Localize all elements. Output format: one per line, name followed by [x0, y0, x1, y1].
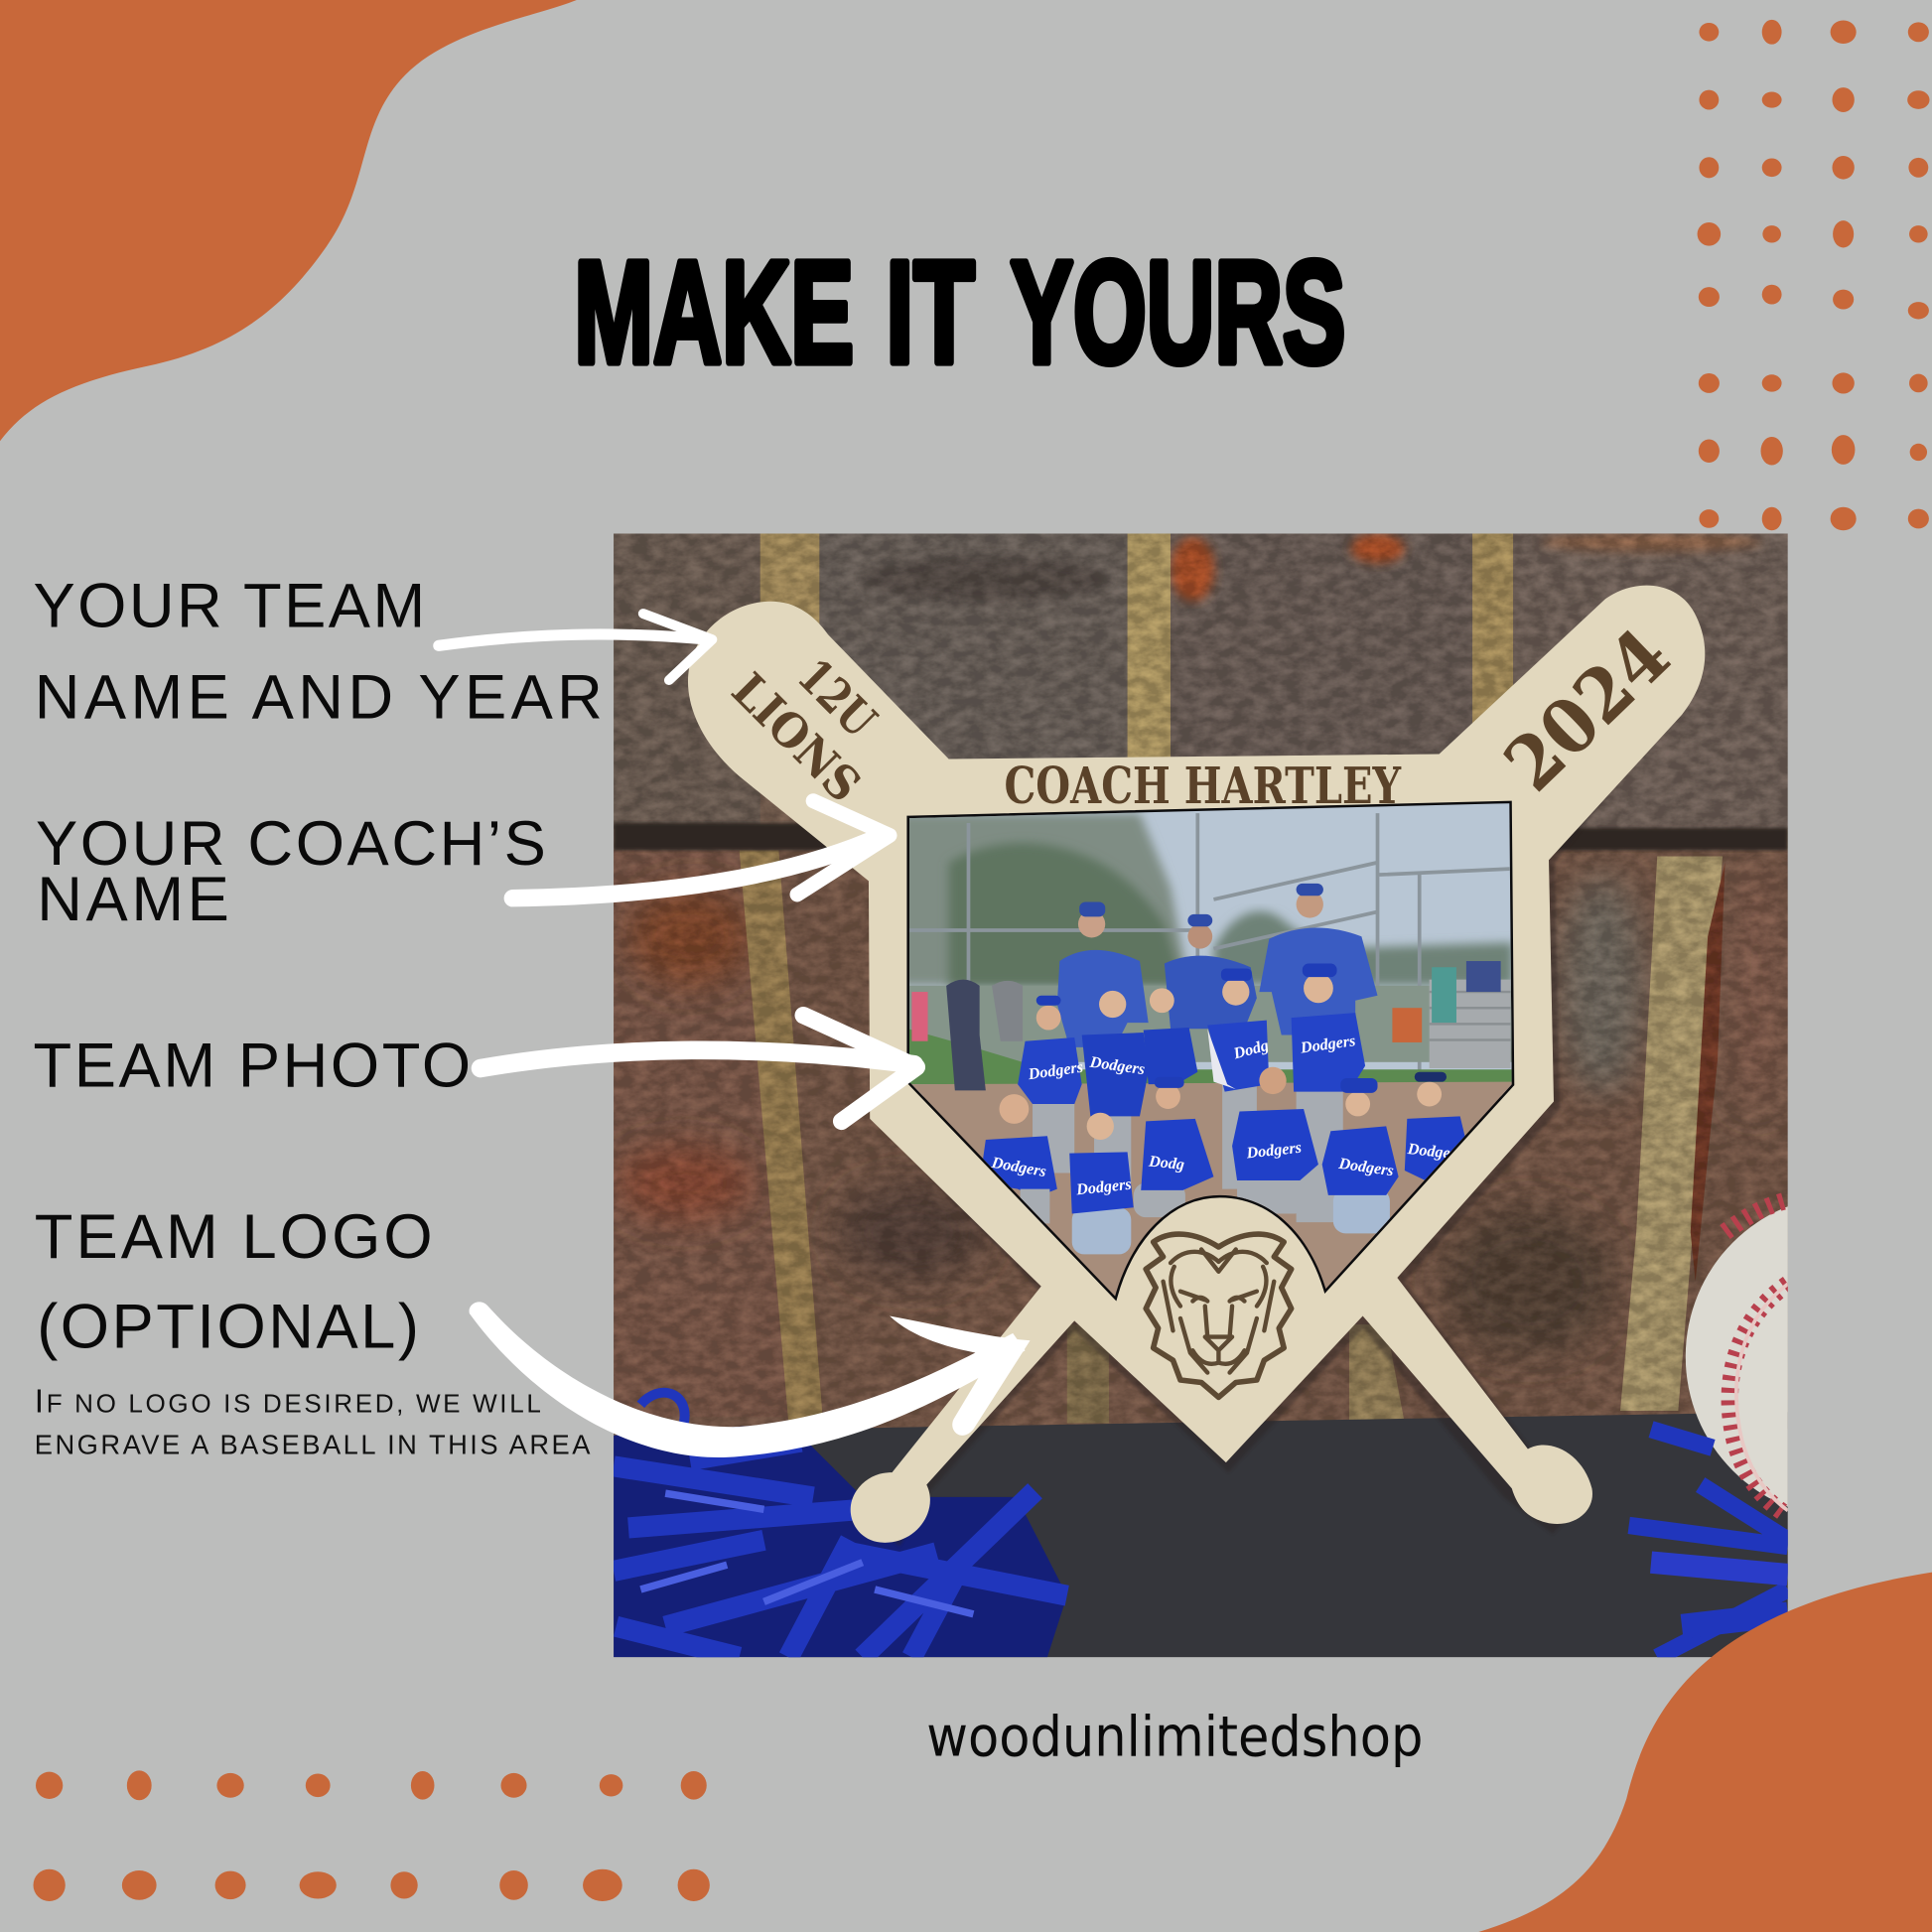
team photo	[899, 801, 1513, 1307]
back row players: Dodg	[1231, 1037, 1271, 1063]
front row players: Dodgers	[1074, 1176, 1132, 1199]
label: team logo: TEAM LOGO	[35, 1202, 433, 1272]
arrow: to team name	[439, 614, 712, 680]
front row players	[980, 1067, 1468, 1254]
title	[574, 231, 1345, 394]
shelf	[788, 1412, 1788, 1657]
engraving: team name: LIONS	[721, 663, 871, 813]
label: team name and year: NAME AND YEAR	[35, 663, 603, 733]
engraving: lion logo	[1146, 1234, 1292, 1397]
dot grid: bottom left	[34, 1770, 710, 1901]
back row players: Dodgers	[1027, 1059, 1084, 1083]
front row players: Dodg	[1147, 1153, 1185, 1173]
arrow: to team photo	[481, 1016, 916, 1121]
title: IT	[886, 231, 975, 394]
brick wall	[614, 532, 1788, 1657]
shop name: woodunlimitedshop	[926, 1706, 1423, 1770]
label: coach's name	[36, 809, 546, 934]
arrow: to team logo	[470, 1302, 1031, 1457]
front row players: Dodgers	[1336, 1156, 1395, 1179]
label: team name and year	[34, 572, 603, 733]
label: team logo	[35, 1202, 433, 1362]
front row players: Dodgers	[989, 1155, 1047, 1180]
engraving: age group: 12U	[786, 649, 887, 749]
decorative blob: bottom right	[1478, 1573, 1932, 1932]
label: coach's name: YOUR COACH’S	[36, 809, 546, 879]
arrow: to coach name	[512, 801, 890, 898]
title: MAKE	[574, 231, 854, 394]
decorative blob: top left	[0, 0, 577, 441]
coaches	[1057, 884, 1378, 1047]
label: coach's name: NAME	[37, 865, 229, 934]
blue streamers	[614, 1393, 1788, 1657]
title: YOURS	[1011, 231, 1345, 394]
back row players: Dodgers	[1299, 1033, 1356, 1057]
note: no logo: IF NO LOGO IS DESIRED, WE WILL	[35, 1383, 541, 1420]
label: team photo: TEAM PHOTO	[34, 1032, 471, 1101]
label: team logo: (OPTIONAL)	[37, 1293, 419, 1362]
front row players: Dodgers	[1406, 1141, 1463, 1164]
product photo	[614, 533, 1788, 1658]
label: team name and year: YOUR TEAM	[34, 572, 425, 641]
photo window	[909, 803, 1512, 1297]
dot grid: top right	[1698, 20, 1930, 530]
note: no logo	[35, 1383, 591, 1459]
back row players: Dodgers	[1088, 1053, 1146, 1078]
back row players	[1018, 964, 1365, 1222]
engraving: coach name: COACH HARTLEY	[1004, 756, 1402, 815]
wood frame	[688, 586, 1705, 1547]
baseball	[1686, 1193, 1788, 1519]
note: no logo: ENGRAVE A BASEBALL IN THIS AREA	[35, 1429, 591, 1459]
front row players: Dodgers	[1245, 1140, 1303, 1163]
engraving: year: 2024	[1487, 612, 1687, 808]
